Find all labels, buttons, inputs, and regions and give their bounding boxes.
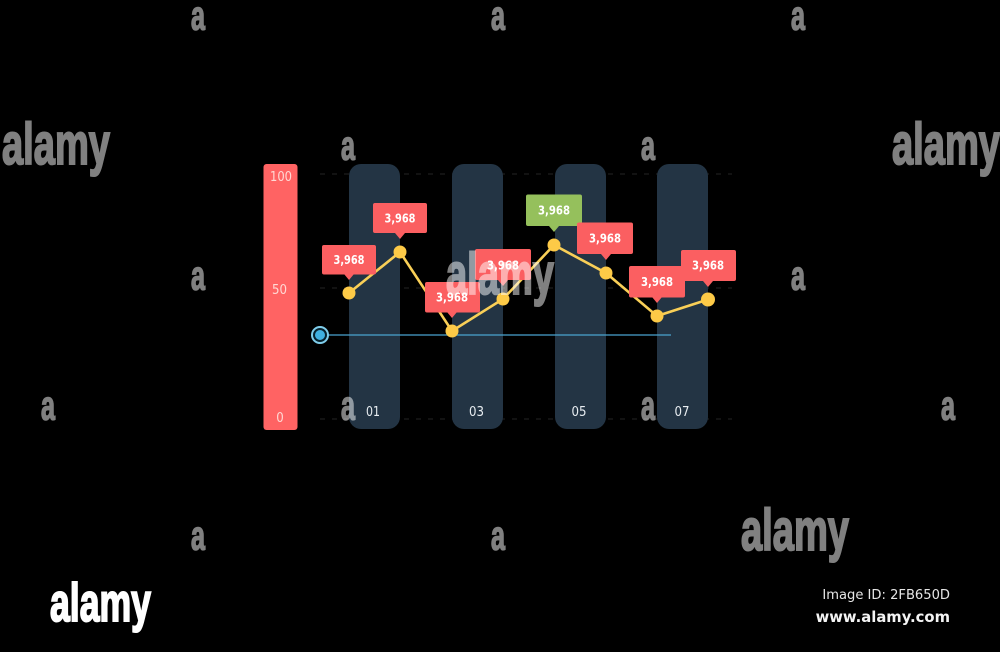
chart bbox=[264, 164, 736, 430]
watermark layer: a bbox=[341, 122, 356, 168]
column 03 bbox=[452, 164, 503, 429]
column 03: 03 bbox=[469, 404, 484, 420]
watermark layer: alamy bbox=[2, 112, 110, 177]
value axis bar: 100 bbox=[270, 169, 292, 185]
alamy logo: alamy bbox=[50, 573, 151, 633]
value axis bar: 0 bbox=[276, 410, 284, 426]
callout 4 bbox=[475, 249, 531, 286]
callout 2: 3,968 bbox=[384, 210, 416, 226]
callout 6: 3,968 bbox=[589, 230, 621, 246]
watermark layer: a bbox=[191, 512, 206, 558]
watermark layer: alamy bbox=[446, 242, 554, 307]
column 01: 01 bbox=[366, 404, 380, 420]
callout 8 bbox=[681, 250, 736, 287]
callout 3 bbox=[425, 282, 480, 318]
website url: www.alamy.com bbox=[816, 609, 950, 626]
callout 5: highlighted: 3,968 bbox=[538, 202, 570, 218]
callout 1: 3,968 bbox=[334, 252, 364, 267]
callout 4: 3,968 bbox=[487, 258, 519, 272]
column 01 bbox=[349, 164, 400, 429]
value axis bar: 50 bbox=[272, 282, 287, 298]
watermark layer: a bbox=[341, 382, 356, 428]
column 07: 07 bbox=[674, 404, 690, 420]
watermark layer: a bbox=[491, 512, 506, 558]
callout 5: highlighted bbox=[526, 194, 582, 232]
watermark layer: a bbox=[641, 382, 656, 428]
blue reference line with marker bbox=[312, 327, 671, 343]
callout 7: 3,968 bbox=[641, 274, 673, 289]
callout 2 bbox=[373, 203, 427, 239]
grid lines bbox=[320, 174, 732, 419]
watermark layer: a bbox=[791, 252, 806, 298]
watermark layer: a bbox=[191, 252, 206, 298]
callout 7 bbox=[629, 266, 685, 303]
callout 6 bbox=[577, 222, 633, 260]
callout 3: 3,968 bbox=[436, 290, 468, 304]
value axis bar bbox=[264, 164, 298, 430]
column 07 bbox=[657, 164, 708, 429]
watermark layer: alamy bbox=[741, 498, 849, 563]
column 05: 05 bbox=[572, 404, 586, 420]
watermark layer: a bbox=[941, 382, 956, 428]
image id: Image ID: 2FB650D bbox=[822, 588, 950, 603]
watermark layer: a bbox=[641, 122, 656, 168]
watermark layer: a bbox=[41, 382, 56, 428]
column 05 bbox=[555, 164, 606, 429]
callout 1 bbox=[322, 245, 376, 280]
callout 8: 3,968 bbox=[692, 258, 724, 272]
yellow line series bbox=[342, 238, 715, 338]
